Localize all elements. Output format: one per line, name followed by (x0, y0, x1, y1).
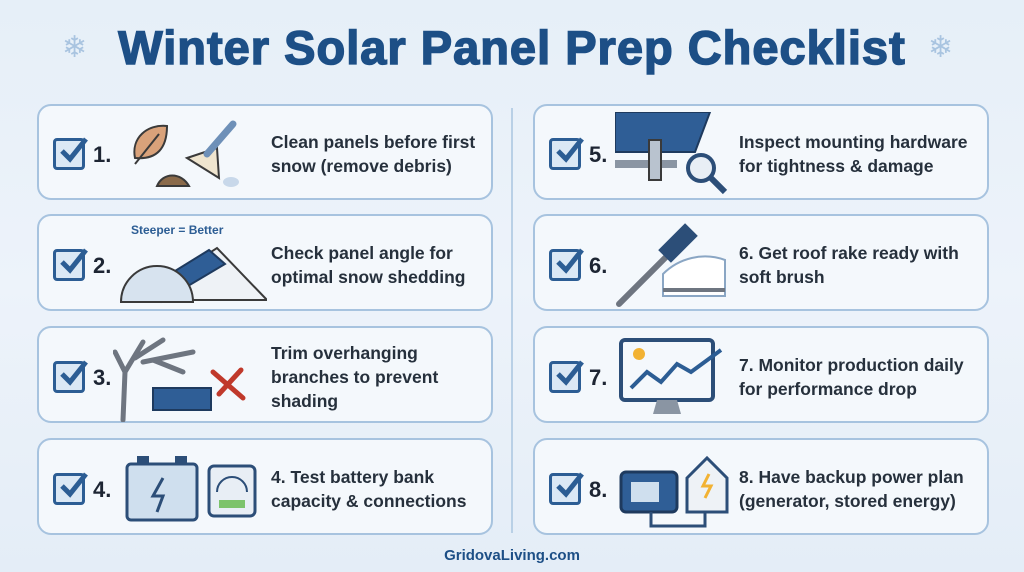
text 5: Inspect mounting hardware (739, 132, 968, 152)
text 3: Trim overhanging (271, 343, 418, 363)
text 8: (generator, stored energy) (739, 491, 956, 511)
icon: mounting hardware (615, 112, 728, 194)
icon: angled solar roof (120, 246, 267, 304)
footer: GridovaLiving.com (444, 547, 580, 564)
icon: generator and house (620, 456, 728, 528)
text 2 (271, 243, 465, 287)
card 1 (37, 104, 493, 200)
number 3: 3. (93, 365, 111, 390)
text 3: shading (271, 391, 338, 411)
text 8 (739, 467, 964, 511)
number 1: 1. (93, 142, 111, 167)
text 3: branches to prevent (271, 367, 438, 387)
text 6 (739, 243, 959, 287)
text 2: Check panel angle for (271, 243, 453, 263)
card 8 (533, 438, 989, 535)
decorative snowflake left: ❄ (62, 31, 87, 64)
card 6 (533, 214, 989, 311)
card 2 (37, 214, 493, 311)
icon: tree, panel, pruner (113, 338, 246, 422)
text 6: soft brush (739, 267, 825, 287)
decorative snowflake right: ❄ (928, 31, 953, 64)
text 6: 6. Get roof rake ready with (739, 243, 959, 263)
text 3 (271, 343, 438, 411)
number 6: 6. (589, 253, 607, 278)
checkbox 7 (549, 361, 581, 393)
text 2: optimal snow shedding (271, 267, 465, 287)
card 4 (37, 438, 493, 535)
number 5: 5. (589, 142, 607, 167)
checkbox 1 (53, 138, 85, 170)
checkbox 6 (549, 249, 581, 281)
text 7: for performance drop (739, 379, 917, 399)
number 2: 2. (93, 253, 111, 278)
text 4: capacity & connections (271, 491, 466, 511)
card 3 (37, 326, 493, 423)
text 4: 4. Test battery bank (271, 467, 434, 487)
number 7: 7. (589, 365, 607, 390)
icon: battery and meter (126, 456, 256, 522)
icon: monitor with chart (619, 338, 722, 414)
text 1 (271, 132, 475, 176)
checkbox 5 (549, 138, 581, 170)
text 1: snow (remove debris) (271, 156, 452, 176)
checkbox 2 (53, 249, 85, 281)
checkbox 4 (53, 473, 85, 505)
title: Winter Solar Panel Prep Checklist (118, 21, 906, 74)
card 5 (533, 104, 989, 200)
number 4: 4. (93, 477, 111, 502)
text 7 (739, 355, 964, 399)
checkbox 3 (53, 361, 85, 393)
text 5: for tightness & damage (739, 156, 933, 176)
text 8: 8. Have backup power plan (739, 467, 964, 487)
text 1: Clean panels before first (271, 132, 475, 152)
text 4 (271, 467, 466, 511)
icon: leaf and brush (133, 120, 239, 187)
text 5 (739, 132, 968, 176)
divider (511, 108, 513, 533)
checkbox 8 (549, 473, 581, 505)
label: steeper = better: Steeper = Better (131, 223, 223, 237)
text 7: 7. Monitor production daily (739, 355, 964, 375)
icon: roof rake (616, 223, 726, 307)
card 7 (533, 326, 989, 423)
number 8: 8. (589, 477, 607, 502)
